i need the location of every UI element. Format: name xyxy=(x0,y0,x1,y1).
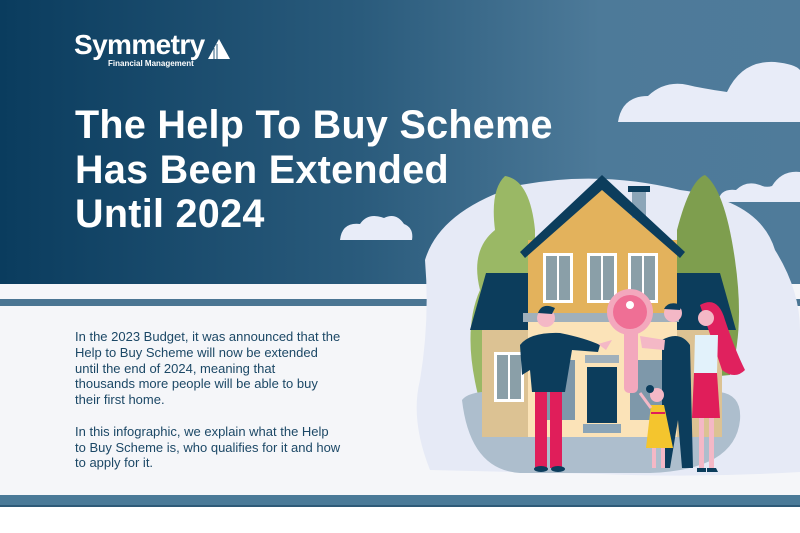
title: Until 2024 xyxy=(75,192,265,236)
cloud: small left xyxy=(340,216,412,240)
text block: intro: their first home. xyxy=(75,392,165,407)
person: man right xyxy=(640,303,693,468)
panel: intro xyxy=(0,306,800,495)
tree left xyxy=(470,176,535,395)
icon: logo triangle xyxy=(208,39,230,59)
logo: Symmetry xyxy=(74,29,205,60)
logo xyxy=(74,29,230,68)
icon: key xyxy=(607,289,653,393)
title xyxy=(75,103,553,236)
text block: intro: In this infographic, we explain what the Help xyxy=(75,424,329,439)
cloud: right small xyxy=(718,172,800,202)
text block: intro: until the end of 2024, meaning that xyxy=(75,361,275,376)
text block: intro: thousands more people will be able to buy xyxy=(75,376,318,391)
text block: intro: to Buy Scheme is, who qualifies for it and how xyxy=(75,440,340,455)
text block: intro: Help to Buy Scheme will now be extended xyxy=(75,345,318,360)
tree right xyxy=(677,175,739,380)
background blob xyxy=(417,179,800,476)
header background xyxy=(0,0,800,284)
text block: intro: In the 2023 Budget, it was announced that the xyxy=(75,329,340,344)
light strip xyxy=(0,284,800,299)
person: girl xyxy=(640,385,673,468)
person: woman xyxy=(692,302,745,472)
bottom band xyxy=(0,495,800,507)
ground shadow xyxy=(462,392,740,473)
house xyxy=(470,175,736,437)
person: man left xyxy=(520,306,612,472)
title: The Help To Buy Scheme xyxy=(75,103,553,147)
title: Has Been Extended xyxy=(75,148,449,192)
text block: intro xyxy=(75,329,340,470)
logo: Financial Management xyxy=(108,59,194,68)
text block: intro: to apply for it. xyxy=(75,455,153,470)
cloud: top right xyxy=(618,62,800,122)
blue band xyxy=(0,299,800,306)
